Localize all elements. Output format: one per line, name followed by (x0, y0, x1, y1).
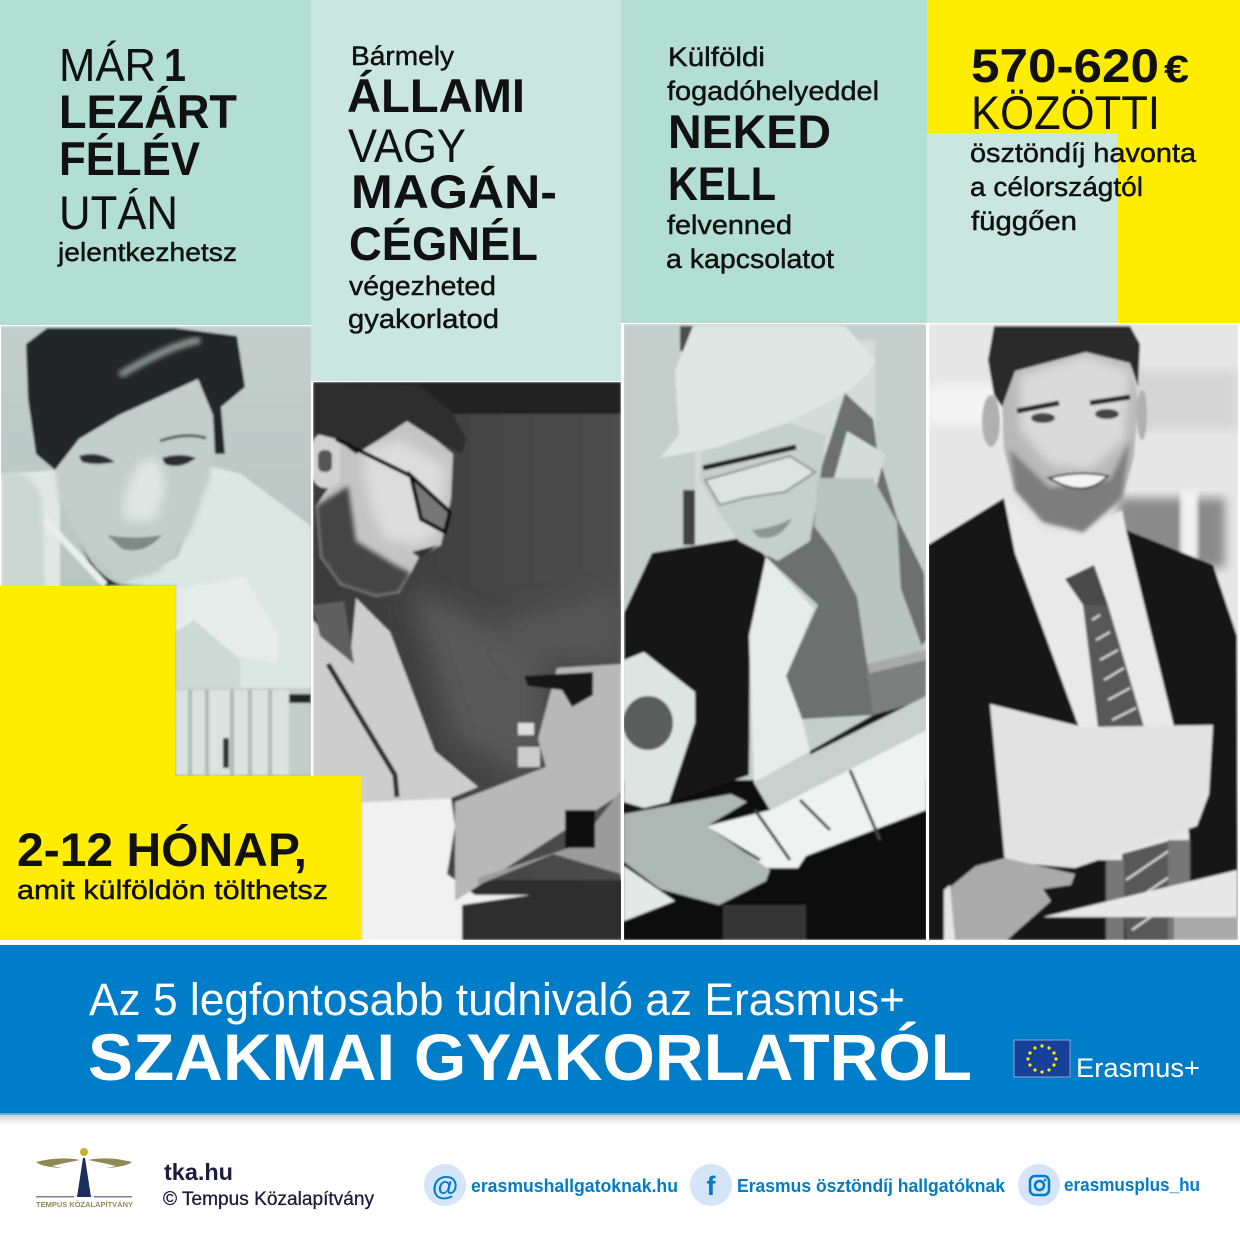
text block: column 1 (57, 39, 237, 267)
contact: instagram (1018, 1164, 1200, 1206)
panel: column 3 background (621, 0, 927, 323)
text block: column 2: Bármely (351, 41, 455, 71)
photo: smiling man in suit with paper (928, 324, 1239, 940)
text block: column 3: felvenned (667, 210, 792, 240)
text block: column 3: KELL (668, 157, 776, 210)
text block: column 1: FÉLÉV (59, 132, 201, 185)
contact: facebook: Erasmus ösztöndíj hallgatóknak (737, 1176, 1006, 1196)
text block: column 2: CÉGNÉL (349, 217, 538, 270)
logo: Erasmus+: Erasmus+ (1076, 1053, 1200, 1083)
text: duration subtext: amit külföldön tölthetsz (17, 875, 328, 905)
text block: column 2: végezheted (349, 271, 496, 301)
banner light edge (0, 1113, 1240, 1115)
panel: yellow duration callout (0, 586, 361, 940)
text block: column 4: KÖZÖTTI (971, 86, 1160, 139)
text block: column 2: MAGÁN- (351, 165, 557, 218)
panel: blue title banner (0, 945, 1240, 1113)
photo: woman with helmet and phone (623, 324, 927, 940)
panel: column 4 background (927, 0, 1240, 323)
text block: column 1: MÁR (59, 39, 156, 91)
logo: Erasmus+ (1014, 1040, 1200, 1083)
text: duration heading: 2-12 HÓNAP, (17, 823, 307, 876)
panel: column 1 background (0, 0, 311, 325)
text block: column 3: Külföldi (668, 42, 765, 72)
text block: column 3 (666, 42, 879, 274)
text block: column 1: LEZÁRT (59, 85, 237, 138)
text block: column 1: jelentkezhetsz (57, 237, 237, 267)
text block: column 3: a kapcsolatot (666, 244, 835, 274)
text block: column 2 (347, 41, 557, 334)
text: organisation credits (163, 1159, 374, 1210)
text block: column 2: VAGY (348, 119, 466, 172)
text block: column 4: 570-620 (971, 39, 1159, 92)
contact: instagram: erasmusplus_hu (1064, 1175, 1200, 1195)
contact: facebook: f (706, 1171, 716, 1201)
logo: Tempus Közalapítvány (36, 1148, 133, 1209)
text block: column 4: a célországtól (970, 172, 1143, 202)
text: banner subtitle: Az 5 legfontosabb tudnivaló az Erasmus+ (89, 974, 905, 1025)
text block: column 3: fogadóhelyeddel (667, 76, 879, 106)
text: organisation credits: © Tempus Közalapítvány (163, 1189, 374, 1210)
text block: column 2: gyakorlatod (348, 304, 499, 334)
text block: column 3: NEKED (668, 105, 831, 158)
contact: website (424, 1164, 678, 1206)
photo: man with glasses in lab coat (313, 382, 625, 940)
text block: column 2: ÁLLAMI (347, 69, 525, 122)
text: organisation credits: tka.hu (164, 1159, 233, 1185)
contact: website: @ (432, 1171, 458, 1201)
photo: woman scientist with pipette (1, 326, 311, 776)
panel: column 2 background (311, 0, 621, 381)
logo: Tempus Közalapítvány: TEMPUS KÖZALAPÍTVÁNY (36, 1200, 133, 1209)
text block: column 4: ösztöndíj havonta (970, 138, 1197, 168)
text block: column 1: UTÁN (59, 186, 178, 239)
text block: column 4: € (1164, 49, 1189, 91)
text: banner title: SZAKMAI GYAKORLATRÓL (88, 1020, 972, 1094)
text block: column 4 (970, 39, 1197, 236)
contact: website: erasmushallgatoknak.hu (471, 1176, 678, 1196)
text block: column 4: függően (971, 206, 1077, 236)
contact: facebook (690, 1164, 1006, 1206)
text block: column 1: 1 (164, 39, 186, 91)
